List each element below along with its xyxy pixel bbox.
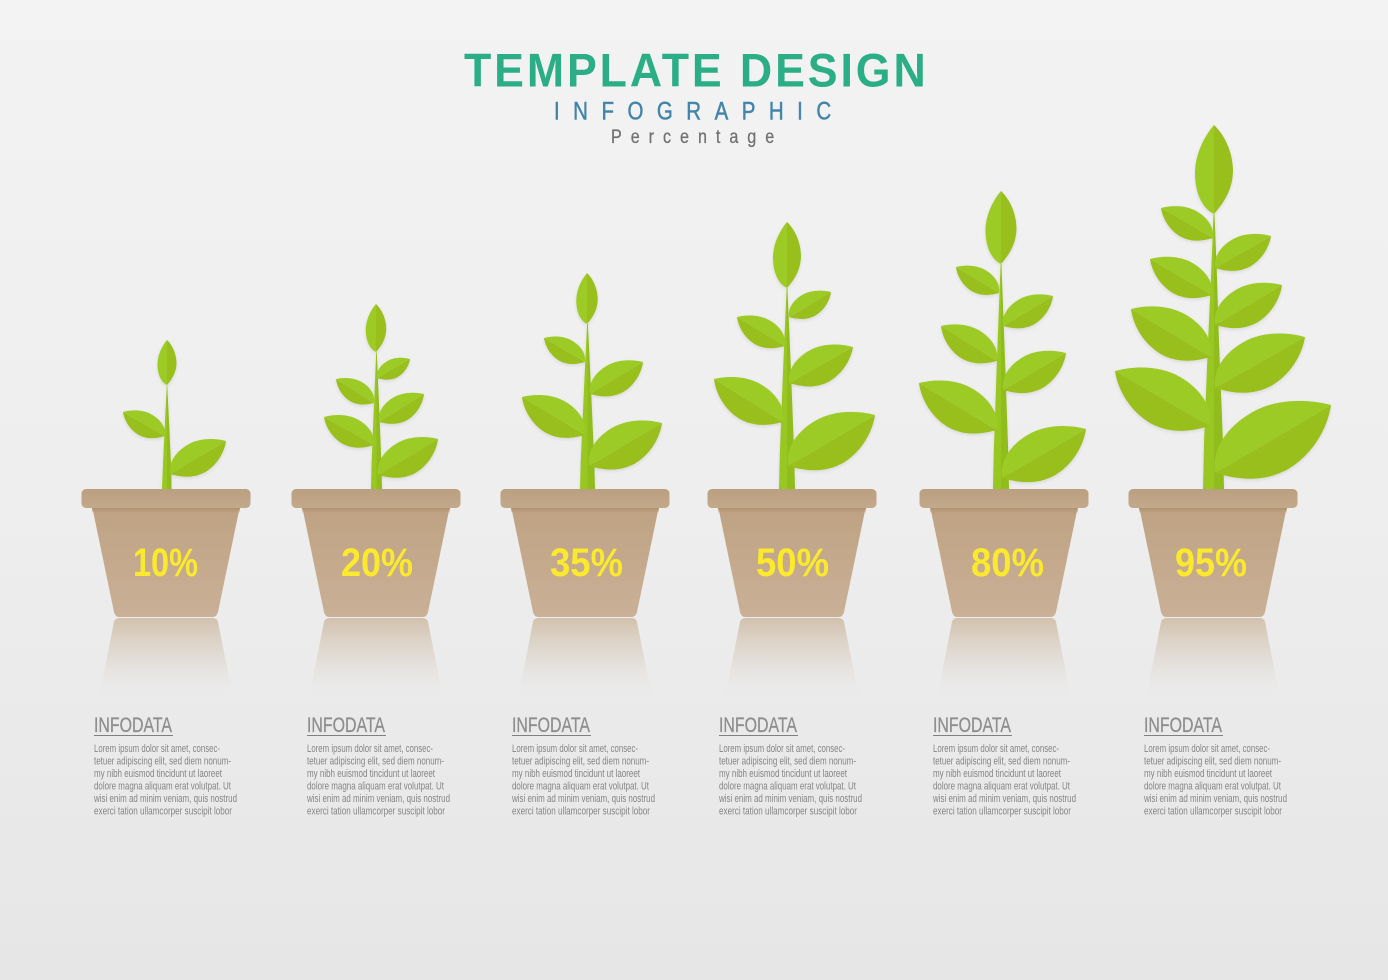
body text: dolore magna aliquam erat volutpat. Ut bbox=[307, 780, 444, 792]
heading: INFODATA bbox=[1144, 714, 1222, 737]
percentage: 95% bbox=[1175, 541, 1247, 585]
body text: dolore magna aliquam erat volutpat. Ut bbox=[719, 780, 856, 792]
body text: exerci tation ullamcorper suscipit lobor bbox=[1144, 806, 1282, 818]
body text: wisi enim ad minim veniam, quis nostrud bbox=[306, 793, 450, 805]
body text: wisi enim ad minim veniam, quis nostrud bbox=[718, 793, 862, 805]
body text bbox=[718, 743, 862, 818]
body text: Lorem ipsum dolor sit amet, consec- bbox=[307, 743, 433, 755]
tagline: Percentage bbox=[611, 126, 774, 147]
body text: dolore magna aliquam erat volutpat. Ut bbox=[933, 780, 1070, 792]
body text: tetuer adipiscing elit, sed diem nonum- bbox=[307, 756, 444, 768]
body text: wisi enim ad minim veniam, quis nostrud bbox=[511, 793, 655, 805]
pot reflection bbox=[725, 618, 859, 698]
body text: exerci tation ullamcorper suscipit lobor bbox=[307, 806, 445, 818]
title: TEMPLATE DESIGN bbox=[464, 44, 926, 97]
body text: my nibh euismod tincidunt ut laoreet bbox=[94, 768, 222, 780]
plant: 95% bbox=[1101, 125, 1348, 502]
body text: tetuer adipiscing elit, sed diem nonum- bbox=[719, 756, 856, 768]
plant: 35% bbox=[512, 273, 673, 489]
body text: dolore magna aliquam erat volutpat. Ut bbox=[1144, 780, 1281, 792]
pot bbox=[292, 489, 460, 617]
pot bbox=[1128, 489, 1298, 617]
column: 50% bbox=[703, 222, 888, 818]
body text: wisi enim ad minim veniam, quis nostrud bbox=[932, 793, 1076, 805]
plant: 50% bbox=[703, 222, 888, 489]
pot reflection bbox=[518, 618, 652, 698]
body text: exerci tation ullamcorper suscipit lobor bbox=[719, 806, 857, 818]
body text bbox=[932, 743, 1076, 818]
column: 20% bbox=[292, 304, 460, 818]
heading: INFODATA bbox=[512, 714, 590, 737]
body text: my nibh euismod tincidunt ut laoreet bbox=[512, 768, 640, 780]
body text: my nibh euismod tincidunt ut laoreet bbox=[1144, 768, 1272, 780]
heading: INFODATA bbox=[933, 714, 1011, 737]
pot reflection bbox=[937, 618, 1071, 698]
pot bbox=[500, 489, 670, 617]
plant: 20% bbox=[317, 304, 447, 490]
pot bbox=[82, 489, 250, 617]
body text: Lorem ipsum dolor sit amet, consec- bbox=[719, 743, 845, 755]
percentage: 50% bbox=[756, 541, 829, 585]
body text: tetuer adipiscing elit, sed diem nonum- bbox=[94, 756, 231, 768]
body text: my nibh euismod tincidunt ut laoreet bbox=[933, 768, 1061, 780]
column: 95% bbox=[1101, 125, 1348, 818]
body text bbox=[1143, 743, 1287, 818]
column: 10% bbox=[82, 340, 250, 818]
title block bbox=[464, 44, 926, 147]
body text: exerci tation ullamcorper suscipit lobor bbox=[512, 806, 650, 818]
body text: my nibh euismod tincidunt ut laoreet bbox=[719, 768, 847, 780]
pot bbox=[708, 489, 876, 617]
body text: wisi enim ad minim veniam, quis nostrud bbox=[93, 793, 237, 805]
body text: wisi enim ad minim veniam, quis nostrud bbox=[1143, 793, 1287, 805]
pot reflection bbox=[1146, 618, 1280, 698]
body text: Lorem ipsum dolor sit amet, consec- bbox=[1144, 743, 1270, 755]
pot reflection bbox=[99, 618, 233, 698]
body text: Lorem ipsum dolor sit amet, consec- bbox=[512, 743, 638, 755]
body text: tetuer adipiscing elit, sed diem nonum- bbox=[512, 756, 649, 768]
plant: 80% bbox=[907, 191, 1098, 499]
body text: exerci tation ullamcorper suscipit lobor bbox=[933, 806, 1071, 818]
heading: INFODATA bbox=[719, 714, 797, 737]
body text: tetuer adipiscing elit, sed diem nonum- bbox=[1144, 756, 1281, 768]
body text: dolore magna aliquam erat volutpat. Ut bbox=[94, 780, 231, 792]
pot reflection bbox=[309, 618, 443, 698]
percentage: 10% bbox=[133, 541, 198, 585]
body text: Lorem ipsum dolor sit amet, consec- bbox=[933, 743, 1059, 755]
body text bbox=[306, 743, 450, 818]
body text: Lorem ipsum dolor sit amet, consec- bbox=[94, 743, 220, 755]
heading: INFODATA bbox=[94, 714, 172, 737]
percentage: 20% bbox=[341, 541, 413, 585]
body text: tetuer adipiscing elit, sed diem nonum- bbox=[933, 756, 1070, 768]
percentage: 80% bbox=[971, 541, 1044, 585]
column: 80% bbox=[907, 191, 1098, 818]
plant: 10% bbox=[117, 340, 234, 489]
pot bbox=[920, 489, 1088, 617]
body text: dolore magna aliquam erat volutpat. Ut bbox=[512, 780, 649, 792]
heading: INFODATA bbox=[307, 714, 385, 737]
percentage: 35% bbox=[550, 541, 623, 585]
body text: exerci tation ullamcorper suscipit lobor bbox=[94, 806, 232, 818]
body text bbox=[511, 743, 655, 818]
subtitle: INFOGRAPHIC bbox=[554, 97, 831, 125]
body text bbox=[93, 743, 237, 818]
column: 35% bbox=[500, 273, 673, 818]
body text: my nibh euismod tincidunt ut laoreet bbox=[307, 768, 435, 780]
